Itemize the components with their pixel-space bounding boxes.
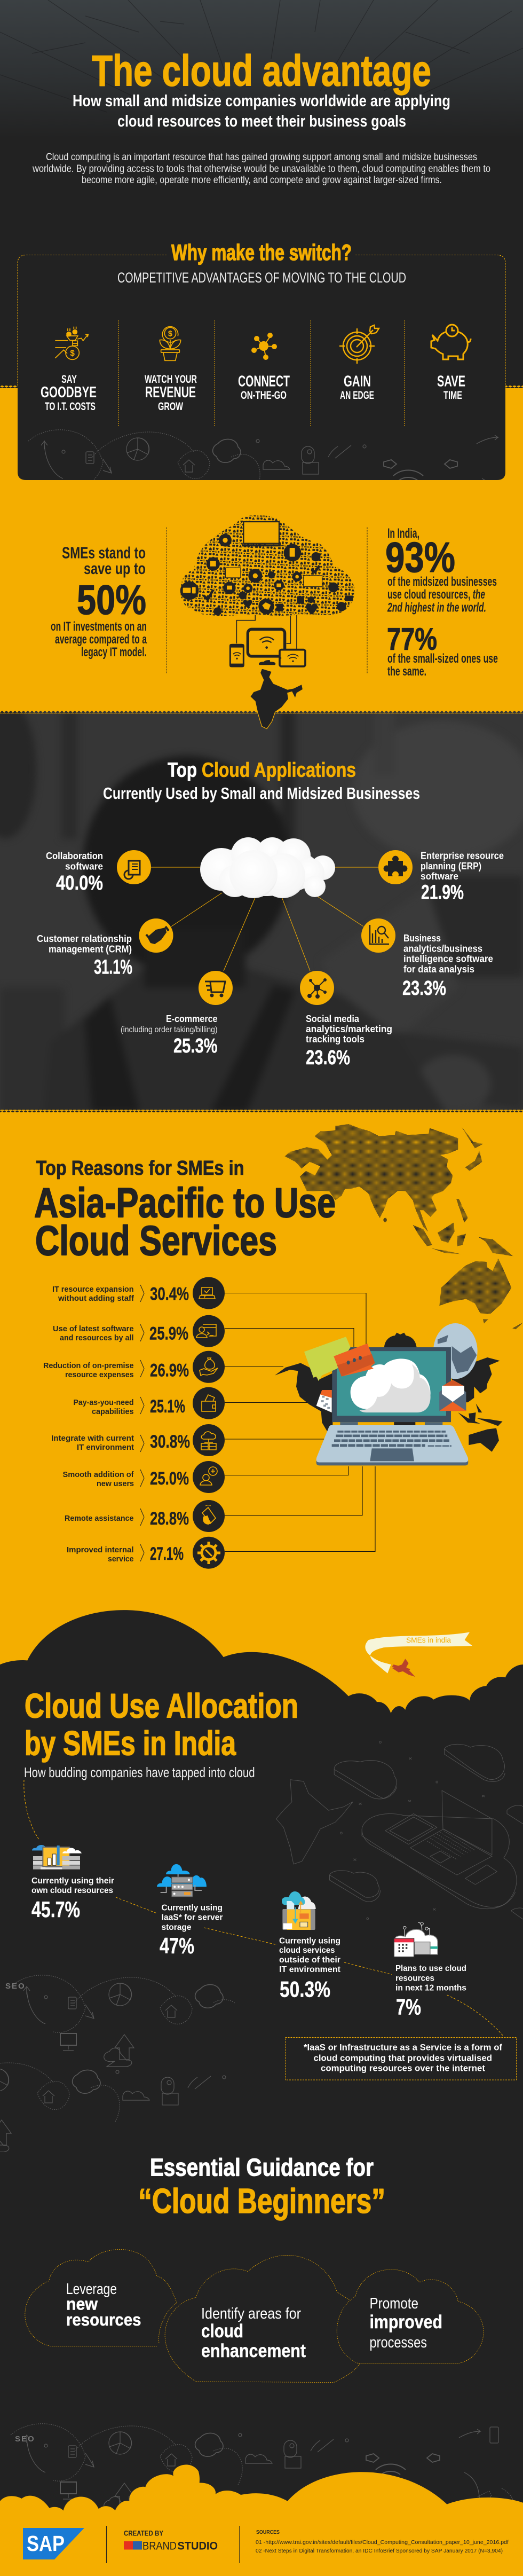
globe — [433, 1323, 478, 1379]
sources — [256, 2529, 509, 2554]
doodles below the allocation section: SEO — [5, 1982, 26, 1991]
label: Enterprise resource — [421, 851, 504, 861]
green speech bubble — [304, 1337, 351, 1381]
label: tracking tools — [306, 1034, 364, 1044]
cloud: cables — [236, 615, 297, 649]
label: Customer relationship — [37, 933, 132, 944]
created by: CREATED BY — [124, 2529, 164, 2538]
column 3 text: ON-THE-GO — [241, 389, 287, 402]
item: CRM — [37, 918, 173, 978]
laptop illustration — [275, 1323, 503, 1465]
column dividers — [118, 320, 405, 427]
icon: bulb with money: $ — [70, 349, 75, 358]
savings statement: average compared to a — [55, 632, 147, 647]
label — [279, 1936, 340, 2001]
white cloud — [200, 837, 335, 898]
savings statement: SMEs stand to — [62, 544, 146, 562]
label: own cloud resources — [31, 1886, 113, 1895]
icon: money plant — [160, 327, 181, 360]
label: Currently using — [161, 1903, 223, 1913]
row: new users: Smooth addition of — [63, 1470, 134, 1479]
label: software — [421, 871, 458, 882]
label — [395, 1964, 466, 2020]
cloud 1 text: Leverage — [66, 2281, 117, 2298]
label: 45.7% — [31, 1897, 80, 1922]
section heading: essential guidance: Essential Guidance for — [150, 2153, 374, 2181]
row: IT resource expansion: 30.4% — [150, 1284, 189, 1305]
label: 40.0% — [56, 872, 103, 894]
column 1 text: TO I.T. COSTS — [45, 400, 96, 413]
subtitle: How small and midsize companies worldwide are applying — [73, 91, 450, 110]
column 4 text: AN EDGE — [340, 389, 374, 402]
reason rows — [43, 1277, 225, 1569]
callout: IaaS definition: computing resources over the internet — [321, 2063, 485, 2074]
photo section background — [0, 700, 523, 1116]
icon: servers and chart — [32, 1845, 82, 1870]
label: analytics/marketing — [306, 1024, 392, 1034]
panel doodle strip — [28, 429, 499, 480]
India statistics: In India, — [387, 526, 419, 541]
label: software — [65, 861, 103, 872]
banner — [365, 1632, 472, 1674]
label: Currently using — [279, 1936, 340, 1945]
gear — [384, 1333, 417, 1347]
panel: SME savings — [51, 515, 498, 679]
item: plans to use cloud — [394, 1922, 466, 2020]
column 2 text: REVENUE — [145, 384, 196, 401]
SEO doodle word: SEO — [15, 2434, 35, 2444]
section heading: cloud use allocation: by SMEs in India — [25, 1724, 236, 1763]
India statistics: the same. — [387, 664, 426, 679]
row: latest software — [53, 1315, 225, 1347]
column 2 text: WATCH YOUR — [145, 373, 197, 386]
India outline — [276, 1780, 353, 1864]
wood texture header background — [0, 0, 523, 139]
label — [402, 933, 493, 1000]
outline specks — [353, 1757, 485, 1911]
cloud 2 text: enhancement — [201, 2341, 306, 2361]
background outline illustrations — [276, 1741, 523, 1920]
row: new users — [63, 1461, 225, 1493]
isometric laptop — [410, 1790, 492, 1875]
cloud 1 text: resources — [66, 2310, 141, 2329]
row: IT resource expansion: without adding staff — [58, 1294, 134, 1303]
zigzag edge: yellow into photo — [0, 711, 523, 713]
column 5 text — [437, 373, 465, 402]
cloud: round badges — [180, 534, 353, 616]
cloud: laptop — [242, 522, 281, 546]
row: integrate: 30.8% — [150, 1432, 190, 1452]
label: outside of their — [279, 1955, 340, 1965]
item: ERP software — [378, 850, 504, 904]
section heading: cloud use allocation — [24, 1687, 298, 1780]
guidance clouds — [25, 2249, 484, 2383]
icon cloud — [180, 515, 355, 667]
item: cloud services outside IT — [279, 1891, 340, 2001]
label — [160, 1903, 223, 1958]
label: IaaS* for server — [161, 1913, 223, 1922]
section heading: top cloud applications: Cloud Applications — [202, 759, 356, 782]
dashed path between items — [24, 1780, 504, 2037]
label: intelligence software — [403, 954, 493, 964]
savings statement: on IT investments on an — [51, 619, 147, 634]
icon: target — [339, 325, 379, 364]
icon: cart — [199, 971, 233, 1005]
savings statement: 50% — [77, 576, 146, 623]
icon: India map — [250, 669, 303, 729]
cloud 3 text: processes — [369, 2334, 427, 2351]
stands — [340, 1422, 442, 1426]
row: on-premise expenses: 26.9% — [150, 1361, 189, 1381]
icon: collaboration — [117, 850, 151, 884]
row: remote assistance — [65, 1500, 225, 1532]
label: in next 12 months — [395, 1983, 466, 1992]
label: Social media — [306, 1014, 360, 1024]
row: latest software: and resources by all — [60, 1333, 133, 1342]
label — [31, 1876, 114, 1922]
cloud: screens — [225, 568, 322, 587]
trackpad — [370, 1448, 414, 1461]
savings statement — [51, 544, 147, 659]
cloud 2 text: cloud — [201, 2321, 243, 2342]
SAP logo: SAP — [27, 2531, 65, 2556]
section heading: top reasons — [34, 1157, 336, 1264]
cloud 3 text — [369, 2295, 442, 2351]
column 2 text — [145, 373, 197, 413]
created by: BRAND — [142, 2540, 177, 2553]
section subheading: Currently Used by Small and Midsized Businesses — [103, 784, 420, 803]
column 1 text — [41, 373, 97, 413]
cloud 2 text: Identify areas for — [201, 2305, 301, 2322]
icon: network — [252, 333, 276, 359]
section heading: cloud use allocation: Cloud Use Allocation — [25, 1687, 298, 1725]
cloud 3 text: Promote — [369, 2295, 418, 2312]
icon: social nodes — [300, 971, 334, 1005]
icon: calendar and cloud — [394, 1922, 438, 1957]
panel: why make the switch — [17, 244, 506, 480]
label: 7% — [396, 1994, 421, 2020]
callout: IaaS definition — [285, 2038, 517, 2080]
row: pay as you need — [74, 1387, 225, 1419]
label: planning (ERP) — [421, 861, 481, 871]
cloud 1 text: new — [66, 2294, 98, 2313]
label: resources — [395, 1974, 434, 1983]
row: IT resource expansion — [52, 1277, 225, 1309]
label: cloud services — [279, 1946, 335, 1955]
subtitle — [73, 91, 450, 130]
label: 47% — [160, 1933, 194, 1958]
label — [46, 851, 103, 894]
heading: Why make the switch? — [171, 240, 352, 265]
device: monitor — [248, 629, 285, 665]
orange speech bubble — [334, 1344, 375, 1377]
cloud: badge glyphs — [183, 538, 299, 610]
section heading: essential guidance — [138, 2153, 385, 2220]
row: on-premise expenses: Reduction of on-premise — [43, 1361, 133, 1370]
envelope — [439, 1380, 466, 1411]
label: 23.3% — [402, 977, 446, 1000]
screen cloud — [351, 1358, 431, 1412]
savings statement: legacy IT model. — [81, 645, 147, 659]
column 1 text: SAY — [61, 373, 77, 386]
label: 21.9% — [421, 882, 464, 904]
row: pay as you need: 25.1% — [150, 1396, 185, 1417]
item: own cloud resources — [31, 1845, 114, 1922]
base — [316, 1425, 468, 1465]
label: 31.1% — [94, 956, 132, 978]
icon: tablet and cloud — [282, 1891, 316, 1930]
banner text: SMEs in india — [406, 1636, 451, 1644]
icon: handshake — [139, 918, 173, 953]
column 5 text: SAVE — [437, 373, 465, 390]
label: storage — [161, 1923, 192, 1932]
device: tablet — [280, 650, 305, 666]
label: for data analysis — [403, 964, 474, 975]
label: IT environment — [279, 1965, 340, 1974]
intro paragraph — [32, 152, 490, 186]
section heading: top cloud applications — [103, 759, 420, 803]
callout: IaaS definition: cloud computing that provides virtualised — [314, 2053, 492, 2063]
calendar — [316, 1390, 332, 1412]
yellow band behind panel — [0, 386, 523, 712]
sources: 02 -Next Steps in Digital Transformation, an IDC InfoBrief Sponsored by SAP January 2017 (N=3,904) — [256, 2548, 503, 2554]
footer yellow cloud — [0, 2465, 523, 2576]
column 3 text: CONNECT — [238, 373, 290, 390]
label — [306, 1014, 392, 1069]
solid world map — [275, 1357, 503, 1452]
label: E-commerce — [166, 1014, 218, 1024]
row: pay as you need: Pay-as-you-need — [74, 1398, 133, 1407]
India statistics: 93% — [385, 533, 455, 581]
label: Currently using their — [31, 1876, 114, 1886]
row: integrate: Integrate with current — [51, 1434, 134, 1443]
item: business analytics — [361, 918, 493, 1000]
section heading: top reasons: Top Reasons for SMEs in — [36, 1157, 244, 1180]
SAP logo — [23, 2528, 84, 2559]
label — [121, 1014, 218, 1057]
row: IT resource expansion: IT resource expansion — [52, 1285, 133, 1294]
footer dividers — [107, 2526, 240, 2563]
dotted map of Asia-Pacific — [284, 1124, 523, 1329]
label: (including order taking/billing) — [121, 1025, 218, 1034]
section heading: essential guidance: “Cloud Beginners” — [138, 2181, 385, 2220]
callout: IaaS definition: *IaaS or Infrastructure as a Service is a form of — [304, 2043, 502, 2053]
India statistics — [385, 526, 498, 679]
yellow section: Asia-Pacific — [0, 1110, 523, 1774]
savings statement: save up to — [84, 559, 146, 578]
dashed dividers — [167, 528, 367, 673]
row: pay as you need: capabilities — [92, 1407, 133, 1416]
row: on-premise expenses — [43, 1351, 225, 1383]
label: 50.3% — [280, 1977, 330, 2001]
cloud 2 text — [201, 2305, 306, 2361]
intro paragraph: become more agile, operate more efficiently, and compete and grow against larger-sized firms. — [82, 175, 442, 186]
label: 25.3% — [173, 1035, 218, 1057]
row: remote assistance: Remote assistance — [65, 1514, 133, 1523]
laptop screen — [332, 1347, 451, 1422]
item: social media analytics — [300, 971, 392, 1069]
created by — [124, 2529, 218, 2553]
label: analytics/business — [403, 944, 482, 954]
item: e-commerce — [121, 971, 233, 1057]
label: management (CRM) — [49, 944, 132, 955]
keyboard — [332, 1432, 451, 1446]
subheading: COMPETITIVE ADVANTAGES OF MOVING TO THE CLOUD — [117, 270, 406, 286]
section heading: top cloud applications: Top — [168, 759, 197, 782]
row: new users: 25.0% — [150, 1468, 189, 1489]
row: internal service: 27.1% — [150, 1544, 184, 1564]
created by: STUDIO — [177, 2540, 218, 2553]
cloud 3 text: improved — [369, 2312, 442, 2332]
device: phone — [229, 644, 244, 667]
India statistics: use cloud resources, the — [387, 587, 485, 602]
column 4 text — [340, 373, 374, 402]
column 4 text: GAIN — [344, 373, 371, 390]
footer — [23, 2526, 509, 2563]
label: Business — [403, 933, 441, 944]
column 3 text — [238, 373, 290, 402]
item: collaboration software — [46, 850, 151, 894]
section heading: top reasons: Cloud Services — [35, 1217, 277, 1264]
title block — [73, 47, 450, 130]
connector lines to cloud — [151, 867, 378, 971]
label — [37, 933, 132, 978]
label: 23.6% — [306, 1047, 350, 1069]
icon: analytics — [361, 918, 395, 953]
subtitle: cloud resources to meet their business goals — [117, 112, 406, 130]
row: on-premise expenses: resource expenses — [65, 1370, 133, 1379]
section heading: top reasons: Asia-Pacific to Use — [34, 1179, 336, 1226]
row: internal service — [67, 1537, 225, 1569]
icon: puzzle — [378, 850, 413, 884]
doodles lower left — [0, 1975, 235, 2152]
sources: SOURCES — [256, 2529, 280, 2535]
row: latest software: 25.9% — [149, 1324, 188, 1344]
row: internal service: Improved internal — [67, 1545, 133, 1554]
isometric outline clouds — [334, 1761, 397, 1799]
row: new users: new users — [97, 1479, 134, 1488]
label — [421, 851, 504, 904]
icon: bulb with money — [55, 327, 88, 359]
India statistics: 77% — [387, 622, 437, 657]
item: IaaS server storage — [157, 1864, 223, 1958]
icon: piggy bank clock — [431, 325, 471, 359]
row: integrate: IT environment — [77, 1443, 134, 1452]
cloud 1 text — [66, 2281, 141, 2329]
connector lines to laptop — [225, 1293, 375, 1551]
dashed cloud outlines — [25, 2249, 484, 2383]
row: latest software: Use of latest software — [53, 1324, 133, 1333]
icon: server stack — [157, 1864, 207, 1897]
plane with banner — [365, 1632, 472, 1677]
main title: The cloud advantage — [92, 47, 431, 95]
label: Plans to use cloud — [395, 1964, 466, 1973]
doodles above footer — [11, 2424, 514, 2521]
column 5 text: TIME — [443, 389, 462, 402]
icon: money plant: $ — [168, 329, 172, 338]
row: internal service: service — [108, 1554, 133, 1564]
row: integrate — [51, 1424, 225, 1456]
biplane — [392, 1659, 415, 1677]
column 2 text: GROW — [158, 400, 183, 413]
row: remote assistance: 28.8% — [150, 1509, 189, 1529]
subtitle: How budding companies have tapped into cloud — [24, 1764, 255, 1780]
column 1 text: GOODBYE — [41, 384, 97, 401]
sources: 01 -http://www.trai.gov.in/sites/default/files/Cloud_Computing_Consultation_paper_10_june_2016.pdf — [256, 2539, 509, 2546]
label: Collaboration — [46, 851, 103, 861]
dark cloud section background — [0, 1610, 523, 1916]
